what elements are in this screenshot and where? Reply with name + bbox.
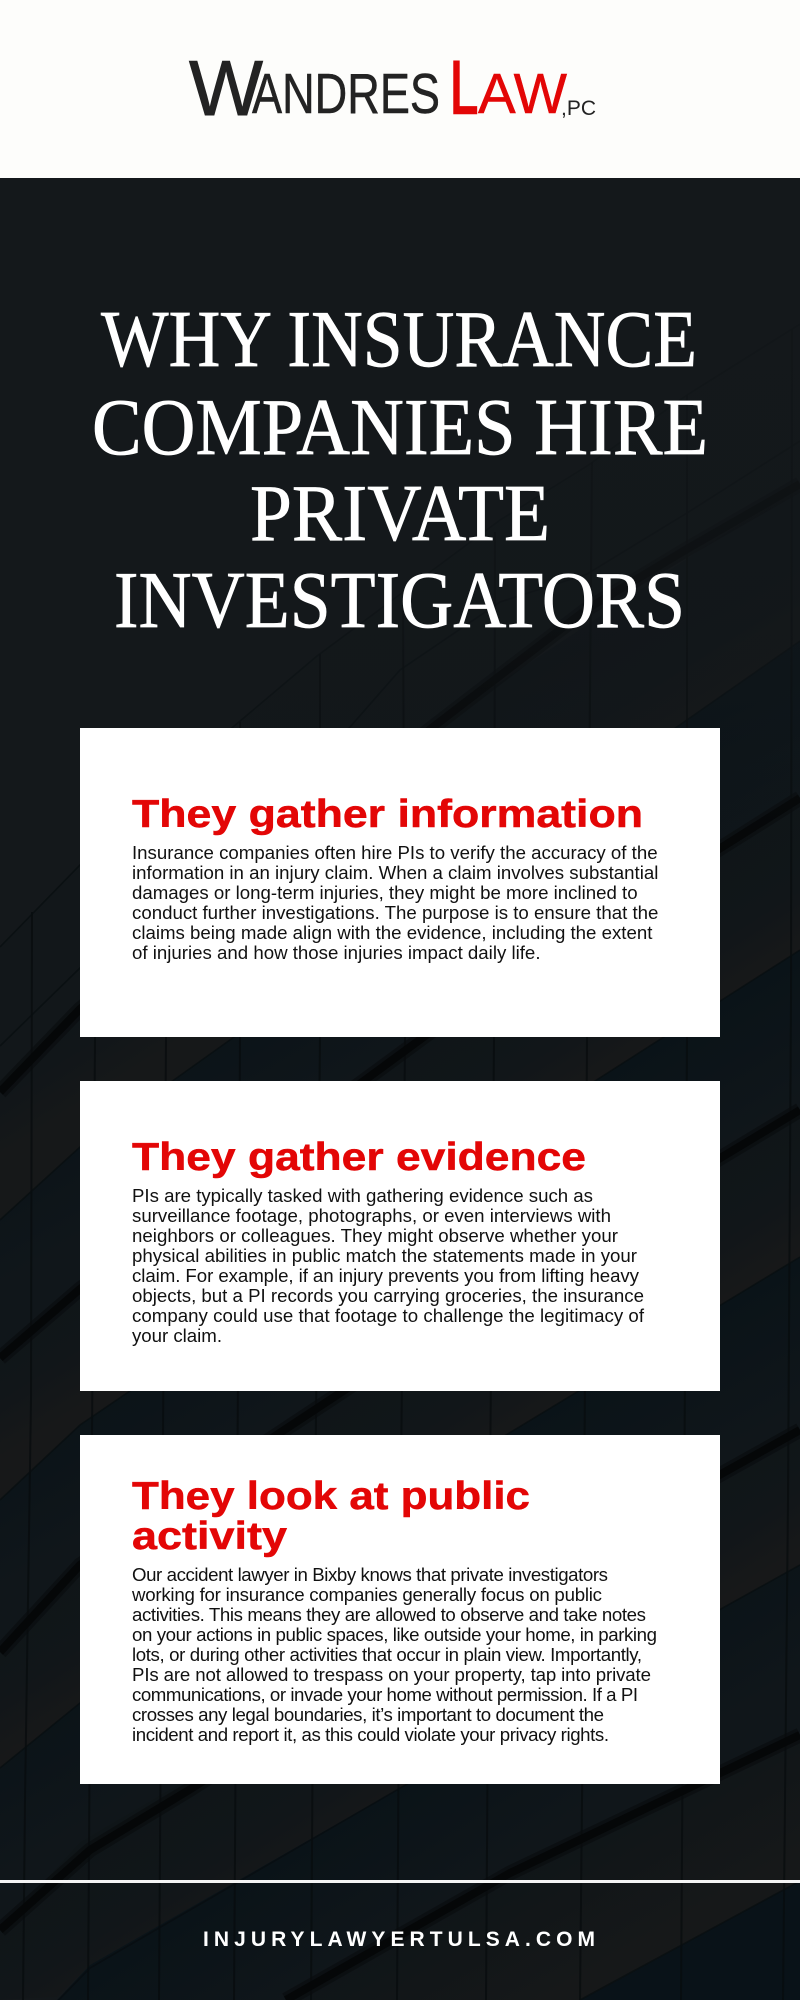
title: COMPANIES HIRE xyxy=(92,382,708,472)
body text: information: Insurance companies often hire PIs to verify the accuracy of the xyxy=(132,842,658,863)
heading: they look at public activity: activity xyxy=(132,1515,288,1558)
title: INVESTIGATORS xyxy=(114,555,685,645)
body text: public activity: lots, or during other activities that occur in plain view. Importantly, xyxy=(132,1644,642,1665)
body text: evidence: physical abilities in public match the statements made in your xyxy=(132,1245,637,1266)
body text: public activity: working for insurance companies generally focus on public xyxy=(131,1584,602,1605)
body text: evidence xyxy=(132,1185,645,1346)
body text: public activity: activities. This means they are allowed to observe and take notes xyxy=(132,1604,646,1625)
body text: evidence: neighbors or colleagues. They might observe whether your xyxy=(132,1225,618,1246)
body text: evidence: objects, but a PI records you carrying groceries, the insurance xyxy=(132,1285,644,1306)
body text: public activity xyxy=(131,1564,657,1745)
body text: public activity: Our accident lawyer in Bixby knows that private investigators xyxy=(132,1564,608,1585)
heading: they look at public activity: They look at public xyxy=(132,1475,530,1518)
body text: information xyxy=(132,842,658,963)
title xyxy=(92,294,708,645)
header band xyxy=(0,0,800,178)
body text: public activity: on your actions in public spaces, like outside your home, in parking xyxy=(132,1624,657,1645)
body text: information: of injuries and how those injuries impact daily life. xyxy=(132,942,540,963)
title: WHY INSURANCE xyxy=(101,294,697,384)
body text: public activity: crosses any legal boundaries, it’s important to document the xyxy=(132,1704,604,1725)
body text: evidence: company could use that footage to challenge the legitimacy of xyxy=(132,1305,645,1326)
body text: public activity: incident and report it, as this could violate your privacy rights. xyxy=(132,1724,609,1745)
footer website: INJURYLAWYERTULSA.COM xyxy=(203,1928,595,1951)
logo: Wandres Law, PC: L xyxy=(450,46,478,129)
logo: Wandres Law, PC: AW xyxy=(478,62,567,126)
logo: Wandres Law, PC: ,PC xyxy=(561,97,596,120)
body text: information: information in an injury claim. When a claim involves substantial xyxy=(132,862,658,883)
panel: they look at public activity xyxy=(80,1435,720,1784)
body text: evidence: surveillance footage, photographs, or even interviews with xyxy=(132,1205,611,1226)
body text: information: claims being made align with the evidence, including the extent xyxy=(132,922,653,943)
heading: they gather information: They gather information xyxy=(132,793,643,836)
body text: information: damages or long-term injuries, they might be more inclined to xyxy=(132,882,638,903)
logo: Wandres Law, PC: ANDRES xyxy=(252,62,440,126)
body text: public activity: PIs are not allowed to trespass on your property, tap into private xyxy=(132,1664,651,1685)
body text: evidence: your claim. xyxy=(132,1325,222,1346)
body text: public activity: communications, or invade your home without permission. If a PI xyxy=(132,1684,638,1705)
body text: evidence: PIs are typically tasked with gathering evidence such as xyxy=(132,1185,593,1206)
heading: they look at public activity xyxy=(132,1475,530,1558)
title: PRIVATE xyxy=(250,468,550,558)
body text: information: conduct further investigations. The purpose is to ensure that the xyxy=(132,902,658,923)
logo: Wandres Law, PC: W xyxy=(189,44,263,132)
heading: they gather evidence: They gather evidence xyxy=(132,1136,586,1179)
body text: evidence: claim. For example, if an injury prevents you from lifting heavy xyxy=(132,1265,640,1286)
panel: they gather evidence xyxy=(80,1081,720,1391)
footer divider xyxy=(0,1880,800,1883)
logo: Wandres Law, PC xyxy=(189,44,596,132)
panel: they gather information xyxy=(80,728,720,1037)
